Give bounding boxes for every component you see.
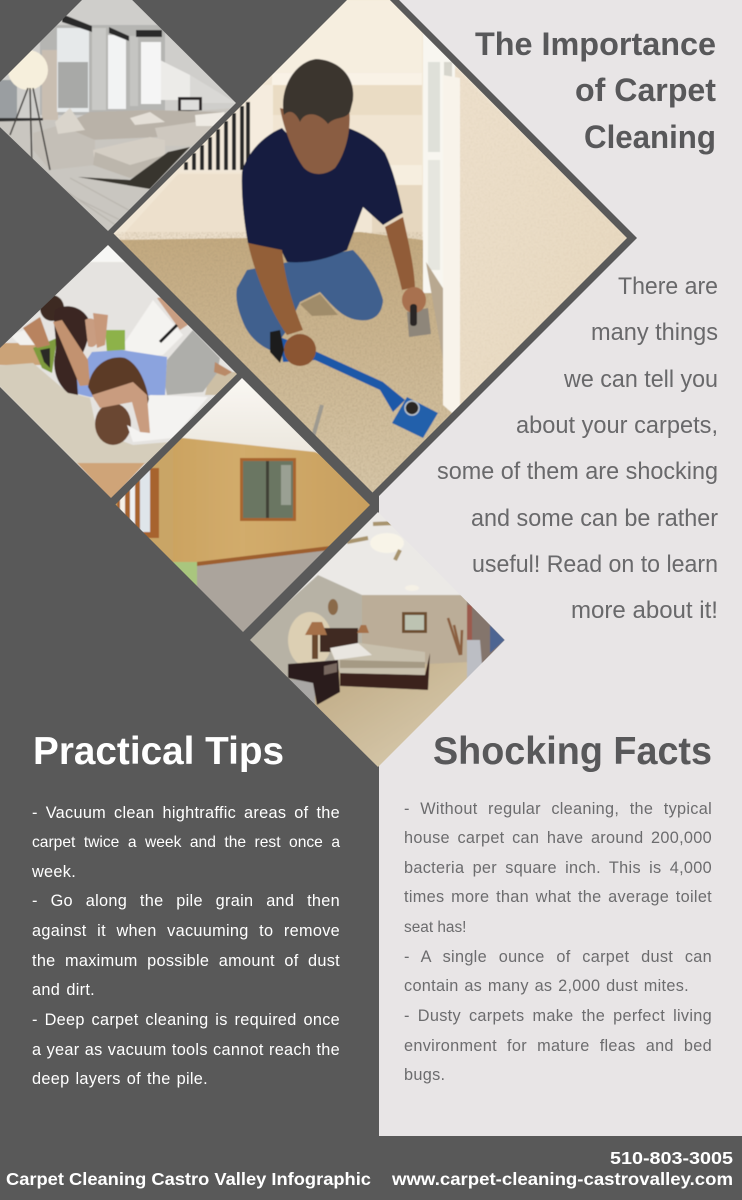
wall texture — [455, 68, 640, 430]
shocking facts list: - A single ounce of carpet dust can — [404, 948, 712, 966]
practical tips list: - Deep carpet cleaning is required once — [32, 1011, 340, 1029]
intro paragraph: useful! Read on to learn — [472, 551, 718, 578]
title: The Importance — [475, 26, 716, 62]
shocking facts list: times more than what the average toilet — [404, 888, 712, 906]
jeans — [236, 250, 383, 351]
shocking facts list — [404, 800, 712, 1084]
wrench — [313, 405, 322, 437]
hand on floor — [402, 287, 426, 313]
title — [475, 26, 716, 155]
practical tips list: a year as vacuum tools cannot reach the — [32, 1041, 340, 1059]
photo: living room — [0, 0, 240, 235]
intro paragraph: more about it! — [571, 597, 718, 624]
tool handle — [280, 337, 405, 412]
practical tips list: - Vacuum clean hightraffic areas of the — [32, 804, 340, 822]
tool head — [392, 397, 438, 438]
practical tips list: - Go along the pile grain and then — [32, 892, 340, 910]
photo: yellow room — [116, 378, 370, 632]
footer — [6, 1148, 733, 1189]
photo: worker stretching carpet — [110, 0, 640, 500]
shocking facts list: seat has! — [404, 919, 466, 936]
shocking facts list: house carpet can have around 200,000 — [404, 829, 712, 847]
knee pad — [270, 330, 284, 363]
leg shadow — [300, 294, 338, 316]
floor vent — [407, 308, 431, 337]
heading: shocking facts: Shocking Facts — [433, 730, 712, 773]
footer: Carpet Cleaning Castro Valley Infographic — [6, 1169, 371, 1189]
practical tips list: the maximum possible amount of dust — [32, 952, 340, 970]
footer: www.carpet-cleaning-castrovalley.com — [391, 1169, 733, 1189]
man — [236, 59, 438, 438]
door — [423, 28, 455, 360]
left arm — [248, 243, 303, 335]
practical tips list — [32, 804, 340, 1088]
intro paragraph: many things — [591, 319, 718, 346]
photo: bedroom — [245, 510, 510, 770]
hair — [283, 59, 353, 124]
practical tips list: against it when vacuuming to remove — [32, 922, 340, 940]
intro paragraph — [437, 273, 718, 624]
tool grip — [410, 304, 417, 326]
carpet speckle — [113, 232, 455, 500]
wainscot — [124, 178, 246, 238]
heading: practical tips: Practical Tips — [33, 730, 284, 773]
face — [280, 108, 350, 174]
shocking facts list: - Without regular cleaning, the typical — [404, 800, 712, 818]
photo: family on carpet — [0, 240, 245, 505]
shocking facts list: bugs. — [404, 1066, 445, 1084]
shocking facts list: contain as many as 2,000 dust mites. — [404, 977, 689, 995]
hand on tool — [284, 334, 316, 366]
shirt — [242, 128, 403, 262]
intro paragraph: There are — [618, 273, 718, 300]
title: Cleaning — [584, 119, 716, 155]
carpet — [113, 232, 455, 500]
shocking facts list: - Dusty carpets make the perfect living — [404, 1007, 712, 1025]
right arm — [385, 217, 415, 290]
back wall — [114, 0, 627, 240]
practical tips list: week. — [32, 863, 76, 881]
intro paragraph: and some can be rather — [471, 505, 718, 532]
intro paragraph: about your carpets, — [516, 412, 718, 439]
tool socket — [405, 401, 419, 415]
footer: 510-803-3005 — [610, 1148, 733, 1168]
textured side wall — [460, 84, 626, 404]
shelves — [248, 0, 422, 240]
radiator stripes — [183, 101, 251, 171]
practical tips list: carpet twice a week and the rest once a — [32, 834, 340, 851]
intro paragraph: we can tell you — [563, 366, 718, 393]
practical tips list: deep layers of the pile. — [32, 1070, 208, 1088]
title: of Carpet — [575, 72, 716, 108]
intro paragraph: some of them are shocking — [437, 458, 718, 485]
practical tips list: and dirt. — [32, 981, 95, 999]
shocking facts list: bacteria per square inch. This is 4,000 — [404, 859, 712, 877]
shocking facts list: environment for mature fleas and bed — [404, 1037, 712, 1055]
